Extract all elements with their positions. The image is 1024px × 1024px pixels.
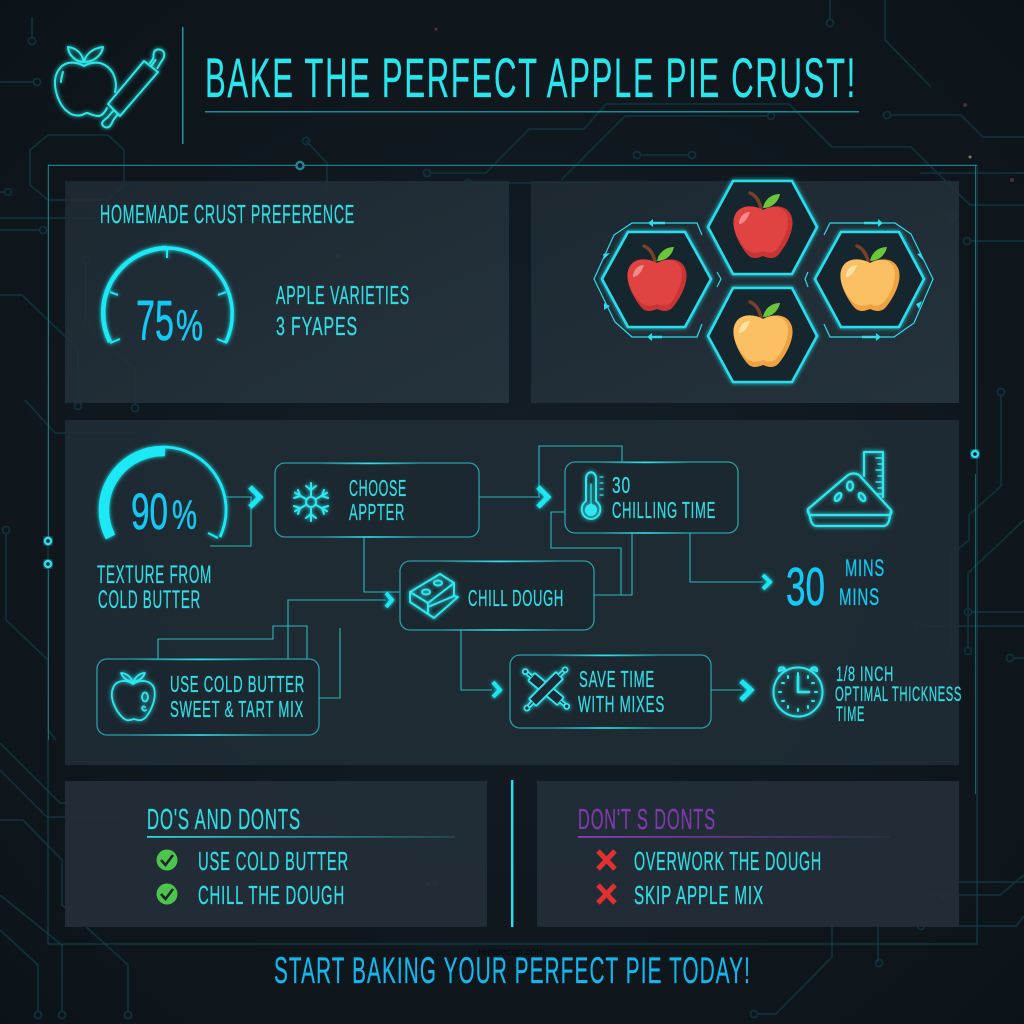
step: save time with mixes [510, 655, 711, 728]
don'ts list [578, 804, 890, 910]
arrows [250, 487, 770, 700]
item: chill the dough: CHILL THE DOUGH [198, 880, 345, 910]
heading: do's and donts: DO'S AND DONTS [147, 804, 301, 836]
text: apple varieties: APPLE VARIETIES [276, 280, 410, 310]
item: use cold butter [156, 846, 349, 876]
step: choose appter: CHOOSE [349, 475, 407, 501]
text: texture from cold butter [97, 561, 212, 614]
heading: don't s donts: DON'T S DONTS [578, 804, 716, 836]
hexagon: bottom yellow apple [708, 288, 817, 382]
step: chilling time [565, 462, 738, 533]
step: use cold butter [97, 659, 319, 735]
gauge: 90%: % [172, 492, 197, 538]
icon: apple outline [112, 673, 155, 720]
icon: apple and rolling pin [55, 47, 164, 127]
hexagon: top red apple [708, 181, 817, 274]
item: skip apple mix [598, 880, 764, 910]
gauge: 75% [103, 248, 232, 353]
item: overwork the dough: OVERWORK THE DOUGH [634, 846, 822, 876]
step: use cold butter: USE COLD BUTTER [170, 671, 305, 697]
item: use cold butter: USE COLD BUTTER [198, 846, 349, 876]
text: apple varieties [276, 280, 410, 341]
panel: process flow [65, 420, 959, 765]
hexagon: right yellow apple [815, 232, 924, 327]
item: chill the dough [156, 880, 345, 910]
gauge: 90%: 90 [131, 483, 168, 540]
step: use cold butter: SWEET & TART MIX [170, 696, 304, 722]
icon: crossed rolling pins [520, 665, 572, 713]
step: chill dough: CHILL DOUGH [468, 585, 564, 611]
icon: pie with ruler [808, 452, 891, 526]
step: save time with mixes: WITH MIXES [578, 691, 665, 717]
icon: butter block [410, 574, 458, 618]
step: choose appter: APPTER [349, 499, 405, 525]
icon: snowflake [294, 483, 328, 521]
gauge: 90% [104, 447, 226, 540]
column divider [511, 780, 513, 927]
step: save time with mixes: SAVE TIME [579, 666, 655, 692]
item: skip apple mix: SKIP APPLE MIX [634, 880, 764, 910]
step: chilling time: 30 [612, 472, 631, 498]
gauge: 75%: 75 [136, 289, 174, 353]
text: texture from cold butter: TEXTURE FROM [97, 561, 212, 589]
do's list [147, 804, 455, 910]
text: texture from cold butter: COLD BUTTER [98, 586, 201, 614]
text: apple varieties: 3 FYAPES [276, 311, 358, 341]
flow connectors [158, 446, 763, 698]
icon: clock [774, 667, 822, 716]
watermark: recipecan.com [478, 947, 545, 958]
panel: don'ts [537, 781, 959, 927]
header divider [182, 27, 184, 144]
icon: thermometer [582, 472, 603, 519]
text: optimal thickness: TIME [836, 703, 865, 726]
step: chill dough [400, 561, 594, 630]
stat: 30 mins: 30 [786, 557, 825, 617]
step: choose appter [275, 463, 479, 537]
step: chilling time: CHILLING TIME [612, 497, 716, 523]
apple variety hexagons [594, 181, 933, 382]
stat: 30 mins: MINS [839, 584, 880, 611]
title underline [205, 111, 859, 112]
item: overwork the dough [598, 846, 822, 876]
panel: apple hexagons [531, 181, 959, 403]
panel: crust preference [65, 181, 509, 403]
text: optimal thickness [835, 663, 962, 726]
stat: 30 mins: MINS [845, 555, 885, 582]
cycle arrows [594, 219, 933, 341]
heading: homemade crust preference: HOMEMADE CRUST PREFERENCE [100, 199, 355, 229]
stat: 30 mins [786, 555, 885, 617]
hexagon: left red apple [602, 232, 711, 327]
gauge: 75%: % [176, 301, 203, 350]
text: optimal thickness: 1/8 INCH [836, 663, 894, 686]
panel: do's [65, 781, 487, 927]
outer frame [45, 162, 978, 944]
